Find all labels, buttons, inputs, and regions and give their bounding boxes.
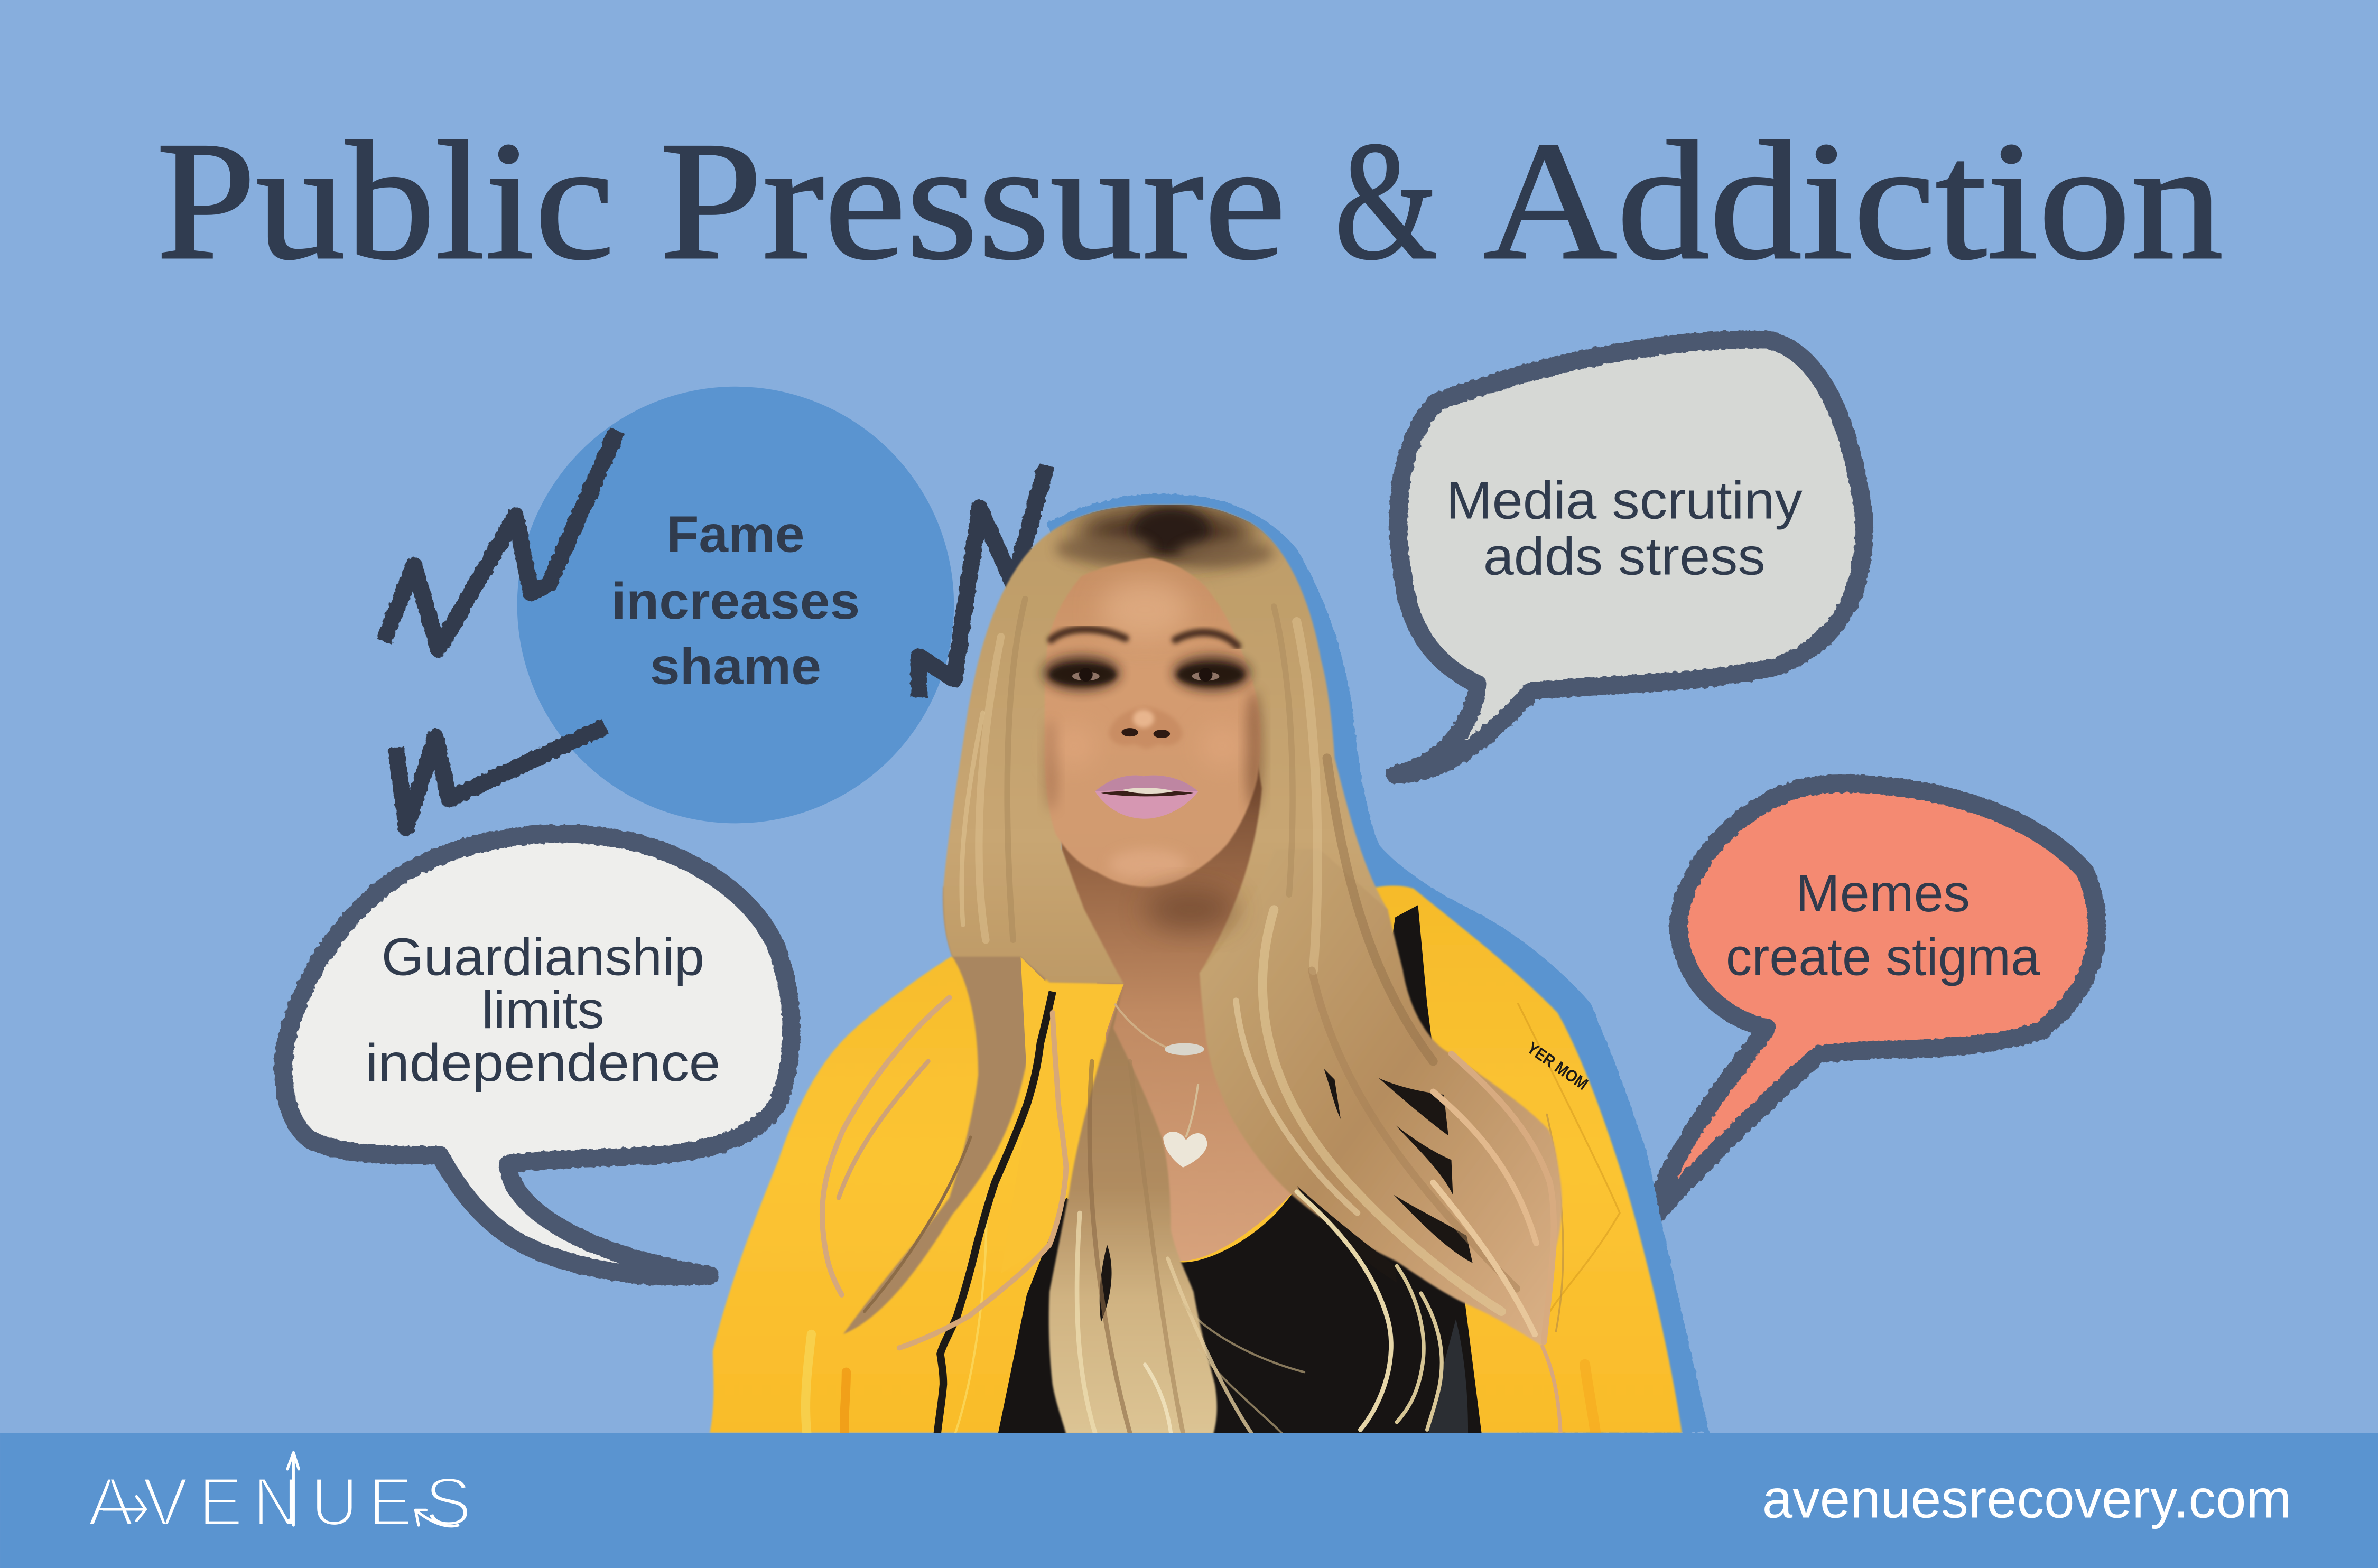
footer band	[0, 1433, 2378, 1568]
speech bubble: memes: create stigma	[1726, 927, 2040, 986]
leather jacket sheen	[1428, 1319, 1468, 1433]
title: Public	[156, 107, 614, 295]
title: Pressure	[659, 107, 1286, 295]
speech bubble: guardianship: limits	[481, 981, 605, 1040]
lips	[1095, 776, 1198, 819]
jacket seams and shading	[805, 1004, 1620, 1433]
speech bubble: guardianship: independence	[366, 1033, 720, 1093]
logo: Avenues: V	[143, 1464, 188, 1540]
speech bubble: media scrutiny: Media scrutiny	[1446, 471, 1803, 530]
eyes	[1043, 657, 1250, 690]
hair strands	[962, 599, 1560, 1433]
logo: Avenues: E	[368, 1464, 413, 1540]
speech bubble: memes: Memes	[1796, 864, 1970, 923]
logo: Avenues	[88, 1452, 472, 1540]
necklaces	[1114, 1004, 1207, 1168]
circle: fame increases shame: increases	[611, 572, 860, 630]
hair front left section	[1049, 984, 1217, 1434]
logo: Avenues: A	[88, 1464, 134, 1540]
circle: fame increases shame: shame	[650, 637, 821, 695]
collar hair strand	[899, 1013, 1066, 1348]
nose	[1109, 706, 1183, 749]
portrait blue halo	[1046, 494, 1709, 1433]
speech bubble: guardianship: Guardianship	[382, 927, 704, 986]
website url: avenuesrecovery.com	[1762, 1468, 2291, 1529]
scribbles: stress lines	[384, 431, 1046, 828]
neck shadow	[1145, 889, 1236, 931]
title: Addiction	[1483, 107, 2223, 295]
speech bubble: memes	[1653, 783, 2097, 1217]
left wisps on jacket	[822, 997, 971, 1311]
zipper left	[937, 992, 1053, 1434]
logo: Avenues: S	[425, 1464, 472, 1540]
logo: Avenues: N	[253, 1464, 299, 1540]
circle: fame increases shame	[517, 387, 954, 823]
speech bubble: guardianship	[283, 834, 791, 1277]
title	[156, 107, 2223, 295]
hair roots	[1055, 507, 1274, 567]
eyebrows	[1051, 629, 1238, 646]
logo: Avenues: E	[199, 1464, 243, 1540]
title: &	[1335, 107, 1438, 295]
jacket collar	[1001, 957, 1124, 1274]
chest and neck	[1055, 713, 1295, 1261]
speech bubble: media scrutiny	[1395, 339, 1864, 774]
circle: fame increases shame: Fame	[666, 506, 804, 563]
jacket	[710, 886, 1682, 1433]
black top and lining	[998, 905, 1482, 1434]
hair front right section	[1200, 849, 1562, 1346]
portrait: woman in yellow jacket	[710, 494, 1709, 1434]
face	[1045, 558, 1261, 887]
logo: Avenues: U	[311, 1464, 358, 1540]
head and side hair	[943, 505, 1388, 1061]
dark gaps in the hair	[1100, 1069, 1473, 1322]
speech bubble: media scrutiny: adds stress	[1483, 527, 1766, 586]
back hair strand over shoulder	[843, 849, 1092, 1334]
jacket lettering: YER MOM	[1524, 1038, 1592, 1094]
face shading	[1043, 579, 1264, 880]
